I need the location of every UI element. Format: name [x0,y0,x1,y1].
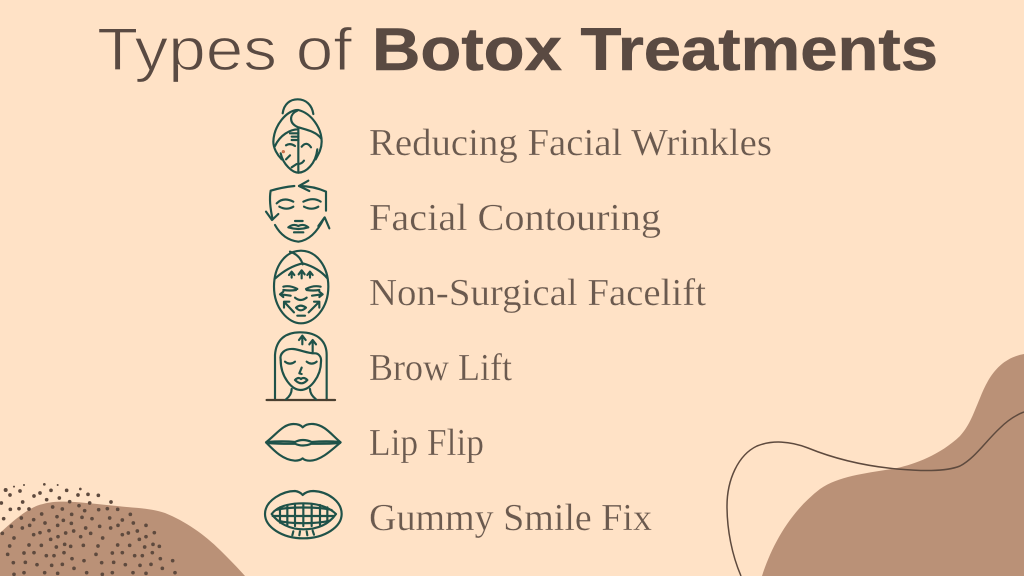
label text: Gummy Smile Fix [369,497,652,539]
icon: face with lifting arrows [274,251,328,323]
decorative curved line [727,412,1024,576]
icon: face with bun and wrinkles [273,99,322,173]
icon: woman with raised brow [267,332,335,400]
label text: Lip Flip [369,422,484,464]
label text: Reducing Facial Wrinkles [369,122,772,164]
list row: Non-Surgical Facelift [274,251,706,323]
icon: gummy smile [265,491,342,538]
list row: Brow Lift [267,332,512,400]
list row: Reducing Facial Wrinkles [273,99,772,173]
list row: Facial Contouring [266,181,661,242]
title: Botox Treatments [372,16,938,83]
icon: lips [266,424,341,461]
title [97,16,938,83]
decorative blob: bottom left [0,502,245,576]
label text: Non-Surgical Facelift [369,272,706,314]
list row: Lip Flip [266,422,484,464]
label text: Brow Lift [369,347,512,389]
list row: Gummy Smile Fix [265,491,652,539]
icon: face with contour arrows [266,181,329,242]
decorative dots [0,483,177,576]
title: Types of [97,16,352,83]
decorative blob: bottom right [762,354,1024,576]
label text: Facial Contouring [369,197,661,239]
